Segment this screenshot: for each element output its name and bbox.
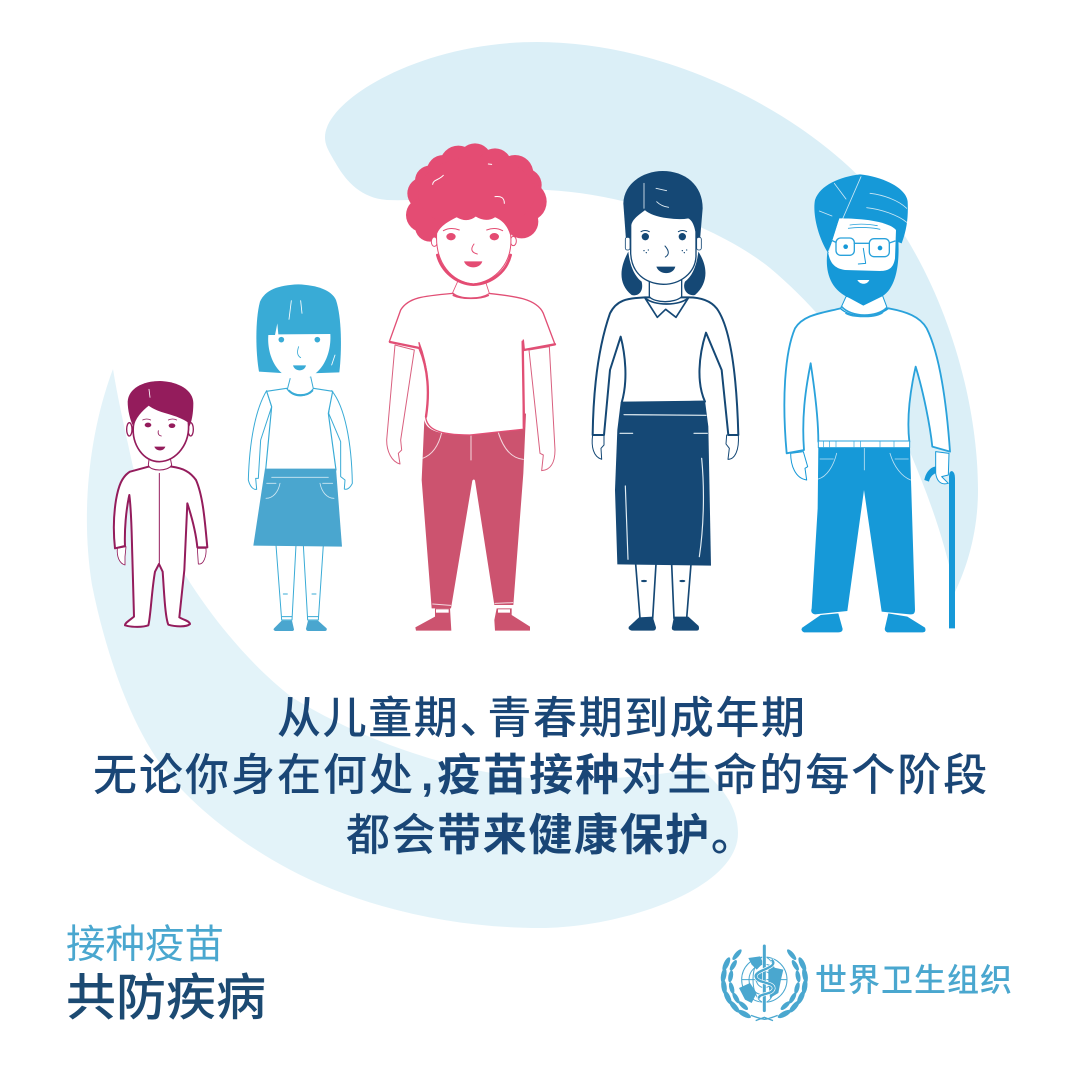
girl top xyxy=(266,388,336,470)
girl legs xyxy=(276,545,323,620)
older man ribbed collar xyxy=(842,307,887,316)
girl skirt xyxy=(253,469,342,547)
toddler face xyxy=(133,405,189,462)
young adult features xyxy=(446,233,499,267)
toddler zip line xyxy=(158,473,161,564)
emblem globe xyxy=(742,957,787,1002)
toddler brows, nose, hair highlight xyxy=(143,389,177,436)
woman sweater xyxy=(593,297,738,435)
older man glasses xyxy=(832,238,895,257)
older man turban lines xyxy=(819,177,907,252)
young adult collar xyxy=(453,295,488,298)
person: toddler xyxy=(114,381,207,627)
older man smile xyxy=(857,280,869,284)
toddler features xyxy=(145,423,175,450)
woman lower hair xyxy=(621,252,705,295)
WHO emblem xyxy=(720,946,809,1021)
woman hands xyxy=(592,435,738,459)
emblem staff and serpent xyxy=(756,946,774,1011)
woman shoes xyxy=(629,617,699,631)
person: older man with turban and cane xyxy=(784,174,955,632)
young adult curly hair xyxy=(406,143,547,242)
young adult sleeve accents xyxy=(390,342,555,427)
woman face xyxy=(631,209,696,284)
woman skirt xyxy=(615,401,711,566)
girl nose xyxy=(298,347,301,358)
older man sweater xyxy=(784,308,950,453)
woman hair xyxy=(623,171,703,240)
main message line 3: 都会带来健康保护。 xyxy=(346,811,756,860)
toddler hair xyxy=(128,381,193,427)
girl skirt details xyxy=(266,477,334,498)
woman collar xyxy=(645,298,688,317)
emblem right laurel xyxy=(777,948,809,1020)
person: girl xyxy=(248,284,352,631)
toddler ears xyxy=(127,423,193,436)
older man beard xyxy=(827,240,899,306)
WHO name: 世界卫生组织 xyxy=(815,962,1013,998)
older man belt band xyxy=(818,441,910,448)
young adult face xyxy=(437,216,511,284)
girl hair highlights xyxy=(289,301,335,365)
young adult shoes xyxy=(415,608,530,631)
older man turban xyxy=(814,174,908,253)
young adult ears xyxy=(431,236,516,246)
girl collar xyxy=(289,391,312,395)
girl face xyxy=(268,323,330,380)
woman neck xyxy=(649,280,682,302)
young adult arms xyxy=(387,345,555,471)
girl arms xyxy=(248,391,352,489)
young adult trouser details xyxy=(423,433,523,605)
older man cane xyxy=(924,466,955,628)
background swirl: upper xyxy=(325,42,978,592)
main message line 1: 从儿童期、青春期到成年期 xyxy=(277,694,807,743)
main message line 2: 无论你身在何处,疫苗接种对生命的每个阶段 xyxy=(93,751,989,800)
girl neck xyxy=(287,377,313,395)
girl hair xyxy=(256,284,341,373)
older man neck xyxy=(841,293,887,316)
young adult chin line xyxy=(437,255,511,285)
campaign slogan line 2: 共防疾病 xyxy=(66,970,266,1026)
young adult trousers xyxy=(422,413,526,608)
young adult brows, nose, hair highlights xyxy=(433,164,504,254)
campaign slogan line 1: 接种疫苗 xyxy=(66,923,224,967)
emblem continents xyxy=(739,956,783,1003)
woman brows, nose, hair highlights xyxy=(641,183,687,257)
older man jeans xyxy=(811,448,915,614)
older man eyes xyxy=(843,244,882,250)
older man nose xyxy=(858,248,866,264)
woman ears xyxy=(625,237,701,250)
toddler suit xyxy=(114,467,207,627)
older man face xyxy=(828,218,896,271)
girl features xyxy=(278,337,320,370)
older man forehead lines xyxy=(848,224,880,229)
woman features xyxy=(642,233,687,273)
older man shoes xyxy=(801,613,925,632)
young adult socks xyxy=(436,609,510,613)
woman knee marks xyxy=(641,580,685,582)
toddler hands xyxy=(117,547,206,565)
older man hands xyxy=(791,452,949,484)
person: young adult with curly hair xyxy=(387,143,555,631)
background swirl: lower xyxy=(87,369,738,928)
emblem laurel knot xyxy=(751,1015,778,1021)
woman legs xyxy=(636,564,691,618)
girl shoes xyxy=(274,621,327,631)
young adult neck xyxy=(453,280,489,298)
woman skirt details xyxy=(620,415,707,559)
person: woman with skirt xyxy=(592,171,738,631)
toddler neck and collar xyxy=(148,457,172,470)
young adult T-shirt xyxy=(389,293,555,435)
older man jeans details xyxy=(818,448,911,480)
emblem left laurel xyxy=(720,948,752,1020)
